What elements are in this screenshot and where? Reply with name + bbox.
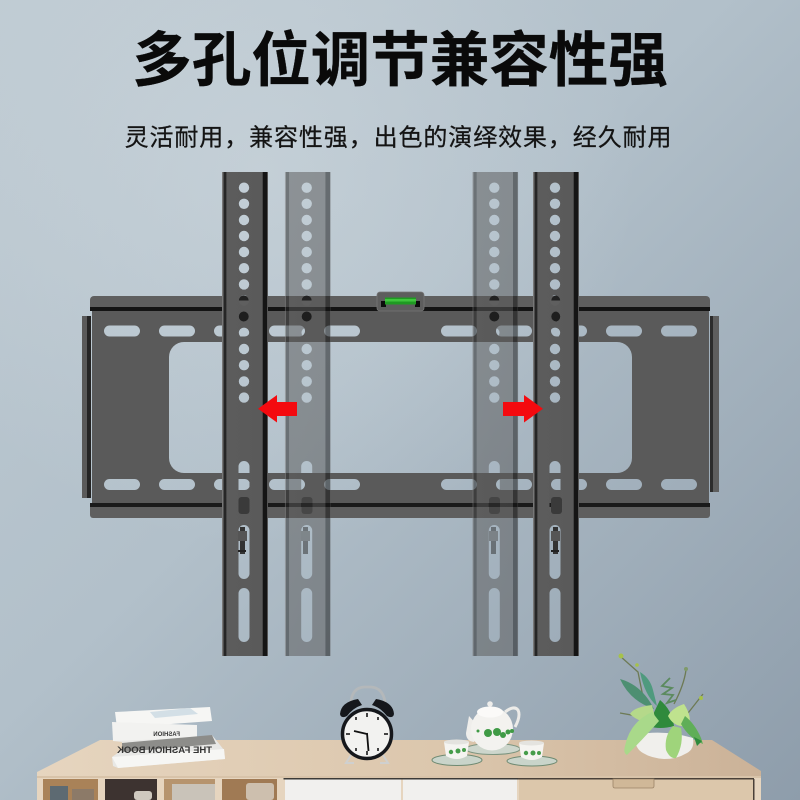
title: 多孔位调节兼容性强 — [132, 27, 668, 94]
stems and twigs — [620, 656, 703, 722]
clock face — [342, 710, 392, 758]
front face — [37, 777, 761, 800]
clock ticks — [346, 713, 388, 755]
teapot set — [466, 701, 520, 754]
top surface — [37, 740, 761, 778]
screw detail — [238, 497, 250, 554]
clock hands — [354, 731, 368, 751]
ivy band — [476, 728, 514, 738]
handle — [505, 708, 519, 727]
green spirit level — [377, 292, 424, 311]
right solid bracket strap — [533, 172, 579, 656]
sideboard — [37, 740, 761, 800]
white drawers — [284, 778, 518, 800]
cubby compartments — [43, 779, 277, 800]
left teacup — [432, 740, 482, 766]
lid — [477, 701, 503, 718]
bells — [340, 699, 362, 717]
dark frame holes — [239, 296, 561, 322]
leaves — [618, 654, 703, 758]
left solid bracket strap — [222, 172, 268, 656]
right ghost bracket strap — [472, 172, 518, 656]
wall mount frame — [82, 292, 719, 518]
left ghost bracket strap — [285, 172, 331, 656]
right side flange — [710, 316, 719, 492]
stack of books — [112, 707, 225, 768]
left side flange — [82, 316, 91, 498]
body — [471, 708, 513, 750]
right teacup — [507, 740, 557, 766]
alarm clock — [340, 687, 394, 763]
potted plant — [618, 654, 703, 759]
wood drawer — [518, 778, 754, 800]
stack of books: FASHION — [153, 732, 180, 738]
spout — [466, 716, 480, 742]
frame plate with slots and window — [90, 296, 710, 518]
tray saucer — [466, 744, 520, 754]
pot — [635, 733, 693, 759]
arrow: left — [258, 395, 297, 422]
handle — [351, 687, 385, 702]
stack of books: THE FASHION BOOK — [117, 745, 212, 756]
subtitle: 灵活耐用，兼容性强，出色的演绎效果，经久耐用 — [125, 124, 672, 152]
arrow: right — [503, 395, 543, 422]
feet — [346, 755, 388, 763]
